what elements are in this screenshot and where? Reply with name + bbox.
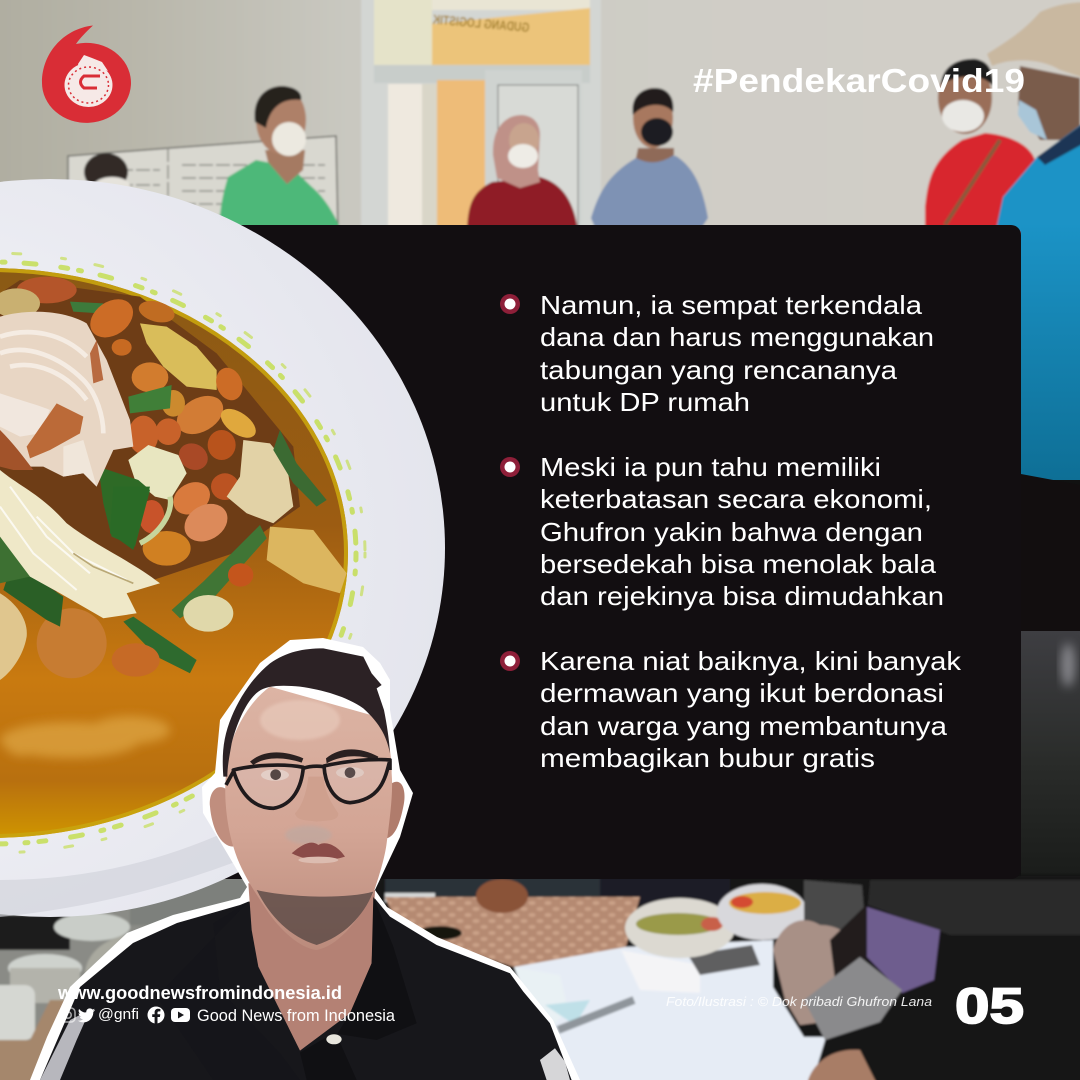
bullet text 2: Ghufron yakin bahwa dengan	[540, 517, 923, 547]
bullet text 3: dermawan yang ikut berdonasi	[540, 678, 944, 708]
bullet text 2: keterbatasan secara ekonomi,	[540, 484, 932, 514]
icon: youtube	[171, 1008, 190, 1022]
mouth	[292, 843, 345, 860]
red G mark	[80, 76, 100, 88]
upper lip shadow	[285, 826, 332, 844]
soup glow	[0, 716, 170, 758]
bullet text 3: dan warga yang membantunya	[540, 711, 948, 741]
shirt	[40, 897, 572, 1080]
dark content panel	[200, 225, 1021, 879]
bullet text 2: Meski ia pun tahu memiliki	[540, 452, 881, 482]
photo: volunteers at warehouse, top background	[0, 0, 1080, 240]
bullet text 3	[540, 646, 962, 773]
bullet text 3: Karena niat baiknya, kini banyak	[540, 646, 962, 676]
handle text: @gnfi	[98, 1006, 139, 1023]
ears	[210, 787, 233, 847]
eyes	[261, 769, 289, 781]
left collar	[157, 902, 300, 1080]
bullet list	[500, 290, 962, 773]
man in red shirt	[925, 133, 1035, 235]
icon: facebook	[148, 1006, 164, 1024]
bullet text 3: membagikan bubur gratis	[540, 743, 875, 773]
shoulder print	[40, 1010, 90, 1080]
icon: instagram	[61, 1008, 75, 1022]
face	[225, 687, 392, 950]
bullet 2	[500, 452, 944, 611]
red drop	[42, 26, 131, 123]
man in blue shirt	[591, 153, 708, 230]
eyebrows	[250, 752, 303, 765]
nose	[295, 777, 338, 822]
neck	[248, 883, 375, 1051]
blue uniform	[996, 118, 1080, 240]
small person left	[84, 153, 128, 191]
portrait: man with glasses, white cut-out outline	[30, 638, 580, 1080]
bullet text 1: tabungan yang rencananya	[540, 355, 898, 385]
glasses	[226, 760, 390, 808]
chicken upper	[0, 312, 133, 487]
white sticker outline	[30, 638, 580, 1080]
bullet text 1	[540, 290, 934, 417]
bullet marker 2	[500, 457, 520, 477]
bullet text 2: dan rejekinya bisa dimudahkan	[540, 581, 944, 611]
green rim speckles	[0, 253, 365, 853]
icon: twitter	[78, 1008, 95, 1022]
soup	[0, 268, 348, 838]
bullet 3	[500, 646, 962, 773]
goatee	[257, 890, 373, 945]
plate bottom shadow	[0, 830, 235, 917]
hair	[223, 648, 390, 777]
woman in hijab	[467, 177, 578, 230]
bullet marker 3	[500, 651, 520, 671]
social media row	[61, 1006, 396, 1025]
chicken lower	[0, 470, 160, 618]
photo: porridge distribution table, bottom background	[0, 875, 1080, 1080]
right collar	[300, 897, 417, 1080]
plate	[0, 179, 445, 917]
bullet text 1: Namun, ia sempat terkendala	[540, 290, 923, 320]
bullet marker 1	[500, 294, 520, 314]
channel name: Good News from Indonesia	[197, 1006, 396, 1025]
food toppings	[0, 277, 347, 680]
page number: 05	[955, 978, 1024, 1034]
eagle head	[78, 55, 108, 74]
photo credit: Foto/Ilustrasi : © Dok pribadi Ghufron Lana	[666, 995, 932, 1009]
food photo: plate of porridge	[0, 179, 445, 917]
soup rim	[0, 270, 346, 836]
bullet text 2: bersedekah bisa menolak bala	[540, 549, 937, 579]
sleeve print	[540, 1048, 570, 1080]
white eagle ring	[64, 63, 112, 107]
whiteboard	[68, 136, 338, 230]
cap man	[1018, 66, 1080, 140]
photo: volunteers at warehouse, top background: GUDANG LOGISTIK	[432, 12, 530, 35]
website url: www.goodnewsfromindonesia.id	[57, 983, 342, 1003]
forehead highlight	[260, 700, 340, 740]
hashtag title: #PendekarCovid19	[693, 62, 1025, 99]
ring texture	[68, 67, 108, 103]
photo: right edge of background	[1021, 225, 1080, 891]
bullet text 1: dana dan harus menggunakan	[540, 322, 934, 352]
green man	[219, 160, 341, 230]
bullet text 2	[540, 452, 944, 611]
bullet text 1: untuk DP rumah	[540, 387, 750, 417]
logo: red speech-drop with eagle G	[42, 26, 131, 123]
collar button	[326, 1034, 342, 1044]
bullet 1	[500, 290, 934, 417]
